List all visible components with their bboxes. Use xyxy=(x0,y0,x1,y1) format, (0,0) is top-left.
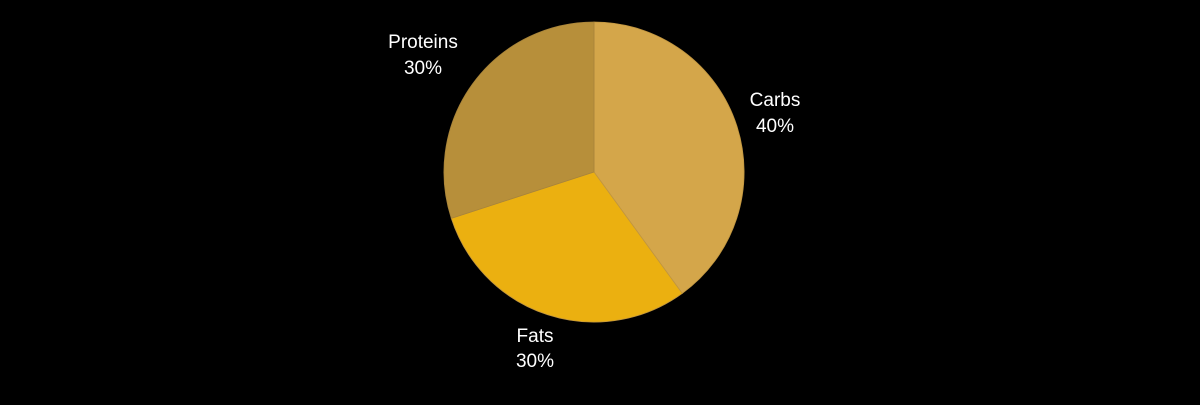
pie chart slices xyxy=(444,22,744,322)
label: fats: Fats xyxy=(517,326,553,347)
label: proteins xyxy=(388,32,458,79)
label: proteins: 30% xyxy=(404,58,442,79)
label: carbs: Carbs xyxy=(750,90,800,111)
label: proteins: Proteins xyxy=(388,32,458,53)
label: fats xyxy=(516,326,554,372)
label: carbs: 40% xyxy=(756,116,794,137)
label: carbs xyxy=(750,90,800,137)
label: fats: 30% xyxy=(516,351,554,372)
slice: fats 30% xyxy=(451,172,682,322)
slice: proteins 30% xyxy=(444,22,594,218)
slice: carbs 40% xyxy=(594,22,744,293)
